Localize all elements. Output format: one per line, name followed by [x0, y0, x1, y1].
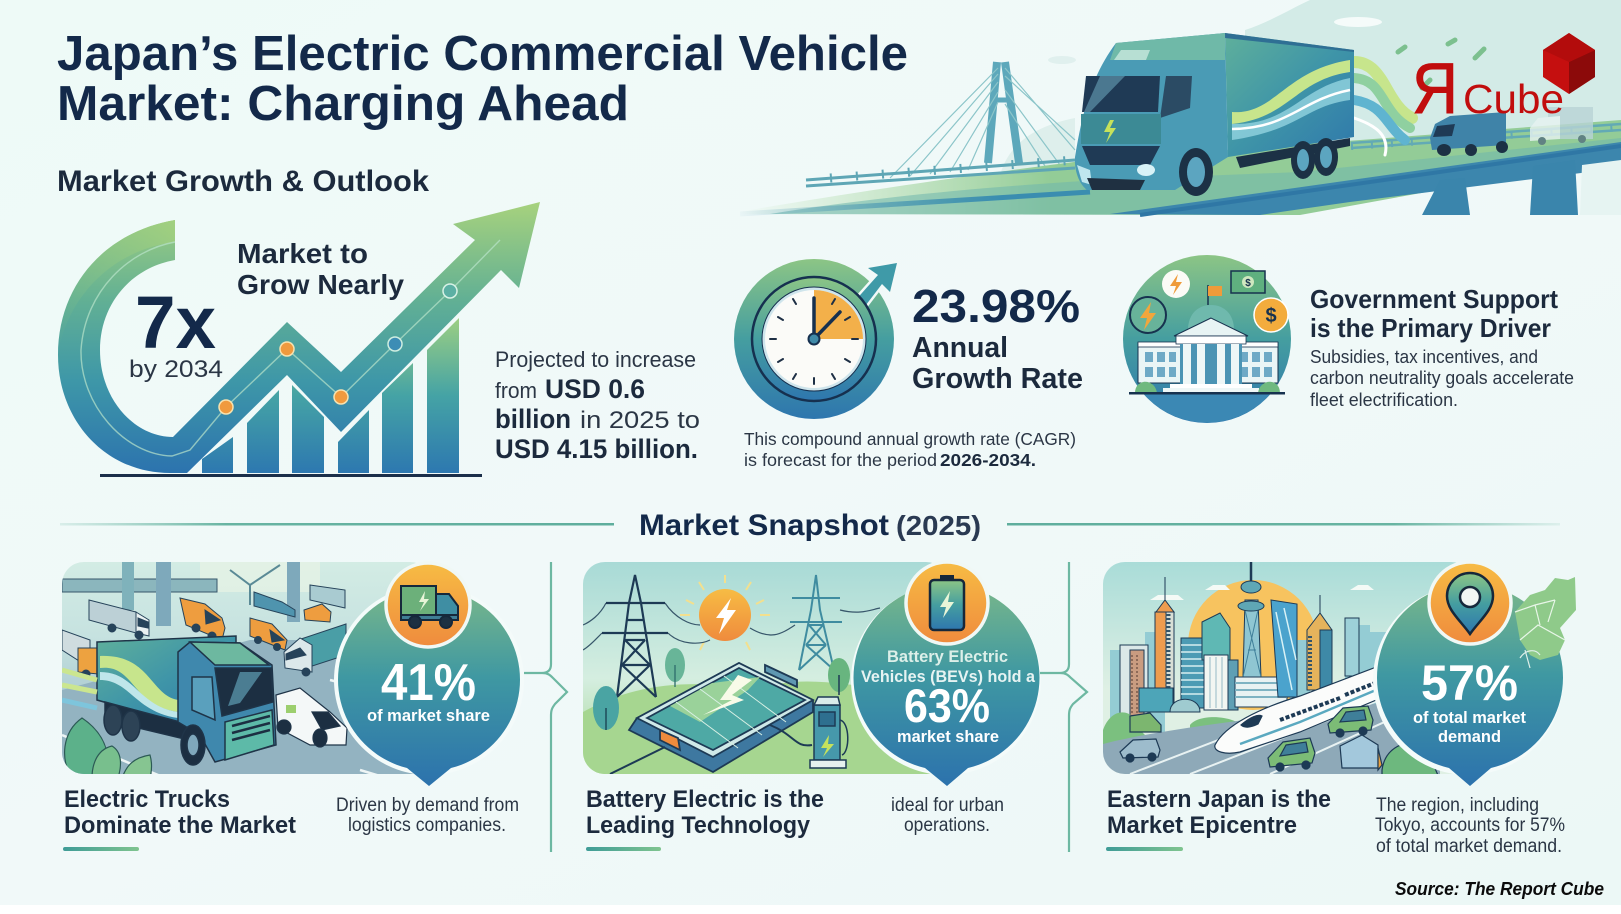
charger [810, 697, 848, 768]
text: projected increase: USD 4.15 billion. [495, 434, 698, 464]
callout bubble: 63%: Vehicles (BEVs) hold a [861, 667, 1036, 686]
text: government support: Government Support [1310, 284, 1558, 314]
pylon, teal [790, 575, 842, 670]
text: government support: carbon neutrality goals accelerate [1310, 368, 1574, 388]
card description: Driven by demand from [336, 795, 519, 816]
icon: location pin [1447, 573, 1493, 634]
cable-stayed bridge tower [890, 62, 1075, 178]
callout bubble: 57%: demand [1438, 727, 1501, 746]
label: market to grow nearly: Market to [237, 238, 368, 269]
map of eastern Japan [1515, 577, 1576, 668]
stat: 7x by 2034: 7x [135, 281, 216, 364]
roads [1103, 704, 1440, 774]
growth chart: ring, arrow and bars [58, 202, 540, 477]
electric and money symbols: $ [1245, 278, 1251, 289]
heading underline [1106, 847, 1183, 851]
text: projected increase: billion [495, 404, 571, 434]
white delivery van [276, 688, 347, 747]
arrow divider 1 [524, 562, 567, 852]
callout bubble: 63%: 63% [904, 679, 990, 732]
Tokyo tower [1238, 548, 1264, 677]
callout bubble: 41%: of market share [367, 706, 490, 725]
text: CAGR note: is forecast for the period [744, 450, 937, 470]
heading: market growth and outlook: Market Growth & Outlook [57, 165, 429, 198]
stat: annual growth rate: Annual [912, 332, 1008, 364]
title: Market: Charging Ahead [57, 77, 629, 131]
callout bubble: 63% [851, 562, 1041, 786]
card description: logistics companies. [348, 815, 506, 836]
logo: RCube: Cube [1463, 76, 1564, 122]
card heading [64, 786, 296, 839]
distant white truck [1530, 107, 1593, 145]
panel: battery electric [583, 562, 1041, 851]
battery pack [629, 663, 813, 772]
logo cube [1543, 33, 1595, 94]
text: projected increase: from [495, 378, 537, 403]
illustration: Tokyo skyline and bullet train [1103, 562, 1456, 774]
buildings [1120, 562, 1360, 716]
callout bubble: 57% [1373, 562, 1576, 786]
card heading: Electric Trucks [64, 786, 230, 813]
stat: 7x by 2034: by 2034 [129, 356, 223, 383]
logo wordmark: Я [1412, 50, 1458, 129]
pylon, dark [602, 575, 668, 697]
bullet train [1214, 667, 1376, 754]
delivery van [1430, 112, 1508, 156]
card description [1375, 795, 1565, 857]
text: projected increase: USD 0.6 [545, 374, 645, 404]
text: CAGR note: 2026-2034. [940, 450, 1036, 470]
panel: electric trucks [62, 562, 524, 851]
label: market to grow nearly [237, 238, 404, 300]
ring and rising arrow [58, 202, 540, 473]
card description: The region, including [1376, 795, 1539, 816]
energy swoosh behind truck [1354, 40, 1484, 155]
text: CAGR note [744, 429, 1076, 470]
text: government support: Subsidies, tax incentives, and [1310, 347, 1538, 367]
hero illustration: electric truck on bridge [726, 0, 1621, 215]
card description [891, 795, 1004, 836]
illustration: battery pack and power grid [583, 562, 948, 774]
cars and truck [1120, 706, 1440, 780]
distant skyline [1110, 625, 1390, 740]
arrow divider 2 [1040, 562, 1087, 852]
logo: RCube [1412, 33, 1595, 129]
electric and money symbols [1130, 270, 1288, 333]
stat: annual growth rate [912, 280, 1083, 395]
title: Japan’s Electric Commercial Vehicle [57, 27, 908, 81]
card heading: Eastern Japan is the [1107, 786, 1331, 813]
card heading: Dominate the Market [64, 812, 296, 839]
callout bubble: 57%: 57% [1421, 655, 1518, 711]
heading: market snapshot: Market Snapshot [639, 509, 889, 542]
source note: Source: The Report Cube [1395, 879, 1604, 899]
illustration: truck fleet on highway [62, 562, 432, 782]
icon: battery [930, 575, 964, 630]
road markings [62, 678, 378, 774]
icon: electric truck [401, 586, 458, 628]
card heading [586, 786, 824, 839]
text: projected increase: in 2025 to [580, 407, 700, 434]
card description: operations. [904, 815, 990, 836]
card heading: Leading Technology [586, 812, 811, 839]
text: CAGR note: This compound annual growth rate (CAGR) [744, 429, 1076, 449]
heading: market snapshot: (2025) [896, 510, 981, 541]
bars [202, 318, 459, 473]
label: market to grow nearly: Grow Nearly [237, 269, 404, 300]
card heading: Market Epicentre [1107, 812, 1297, 839]
foreground leaves [65, 718, 152, 778]
text: projected increase [495, 347, 700, 464]
text: government support: fleet electrification. [1310, 390, 1458, 410]
foliage [1103, 712, 1245, 745]
sun [680, 575, 770, 650]
text: government support [1310, 284, 1574, 410]
text: government support: is the Primary Driver [1310, 313, 1551, 343]
card description [336, 795, 519, 836]
panel: eastern Japan [1103, 548, 1576, 857]
main truck [62, 636, 276, 765]
section divider lines [60, 523, 1560, 526]
capitol building [1129, 285, 1285, 394]
card heading [1107, 786, 1331, 839]
heading underline [586, 847, 661, 851]
stat: annual growth rate: 23.98% [912, 280, 1080, 332]
heading underline [63, 847, 139, 851]
icon: government building [1123, 255, 1291, 423]
hills [1000, 0, 1621, 175]
card description: of total market demand. [1376, 836, 1562, 857]
electric and money symbols: $ [1265, 305, 1277, 327]
callout bubble: 41%: 41% [381, 654, 476, 712]
icon: clock with growth arrow [734, 259, 897, 419]
callout bubble: 41% [334, 563, 524, 786]
main truck [1075, 33, 1354, 196]
data points [219, 284, 457, 414]
title [57, 27, 908, 131]
callout bubble: 57%: of total market [1413, 708, 1526, 727]
background trucks and vans [62, 585, 346, 678]
trees [593, 648, 850, 730]
road deck [726, 120, 1621, 215]
power lines [583, 603, 880, 650]
callout bubble: 63%: Battery Electric [887, 647, 1008, 666]
card heading: Battery Electric is the [586, 786, 824, 813]
card description: ideal for urban [891, 795, 1004, 816]
baseline [100, 474, 482, 477]
callout bubble: 63%: market share [897, 727, 999, 746]
text: projected increase: Projected to increase [495, 347, 696, 372]
card description: Tokyo, accounts for 57% [1375, 815, 1565, 836]
stat: annual growth rate: Growth Rate [912, 363, 1083, 395]
